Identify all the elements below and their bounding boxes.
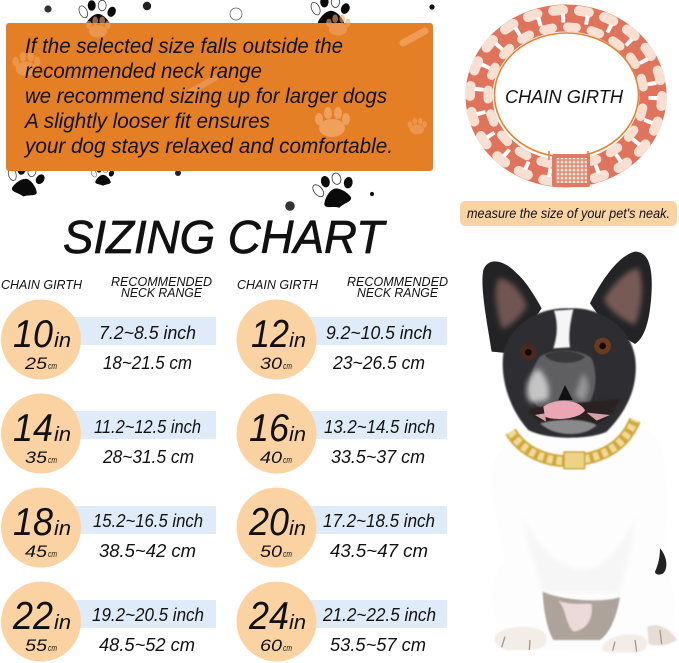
eyes <box>520 338 611 361</box>
size row: 12 in: in <box>289 330 306 352</box>
size row: 16 in: 13.2~14.5 inch <box>324 417 435 437</box>
title: SIZING CHART <box>63 211 387 263</box>
size row: 18 in: 38.5~42 cm <box>99 541 196 561</box>
size row: 14 in: in <box>54 424 71 446</box>
right ear <box>590 252 652 344</box>
caption pill: measure the size of your pet's neak. <box>467 206 670 221</box>
size row: 10 in: in <box>54 330 71 352</box>
size row: 12 in: 12 <box>251 313 289 356</box>
gold chain collar <box>511 420 635 469</box>
size row: 14 in: 28~31.5 cm <box>102 447 194 467</box>
size row: 24 in: 60 <box>260 636 283 655</box>
dog body <box>492 420 675 653</box>
label: chain girth: CHAIN GIRTH <box>505 87 624 107</box>
size row: 24 in <box>236 582 447 662</box>
size row: 16 in: cm <box>283 455 292 465</box>
size row: 18 in: 45 <box>25 542 48 561</box>
size row: 22 in: 19.2~20.5 inch <box>92 605 204 625</box>
size row: 22 in: 22 <box>12 595 53 638</box>
size row: 22 in: cm <box>48 643 57 653</box>
size row: 10 in: 18~21.5 cm <box>103 353 192 373</box>
column headers: right: NECK RANGE <box>357 286 439 300</box>
size row: 16 in: 16 <box>249 407 289 450</box>
size row: 20 in: 43.5~47 cm <box>330 541 428 561</box>
size row: 18 in: cm <box>48 549 57 559</box>
caption pill <box>460 201 677 226</box>
size row: 16 in: 33.5~37 cm <box>331 447 425 467</box>
size row: 24 in: cm <box>283 643 292 653</box>
belly patch <box>543 592 620 640</box>
size row: 22 in <box>1 582 216 662</box>
girth ring <box>494 33 638 157</box>
size row: 24 in: 21.2~22.5 inch <box>322 605 436 625</box>
column headers: left <box>1 275 212 300</box>
advice text <box>23 35 393 158</box>
chain girth diagram <box>470 10 662 187</box>
size row: 12 in: 9.2~10.5 inch <box>326 323 432 343</box>
column headers: left: NECK RANGE <box>121 286 203 300</box>
advice text: recommended neck range <box>25 60 262 83</box>
paw toe lines <box>502 630 662 652</box>
column headers: left: CHAIN GIRTH <box>1 278 83 292</box>
size row: 24 in: in <box>289 612 306 634</box>
tongue <box>543 401 585 419</box>
size row: 16 in <box>236 394 447 474</box>
size row: 24 in: 24 <box>248 595 289 638</box>
front and back paws <box>495 625 677 653</box>
size row: 10 in: 25 <box>24 354 48 373</box>
size row: 18 in: 15.2~16.5 inch <box>93 511 203 531</box>
column headers: left: RECOMMENDED <box>111 275 212 289</box>
size row: 16 in: in <box>289 424 306 446</box>
size row: 10 in: cm <box>48 361 57 371</box>
size row: 16 in: 40 <box>260 448 283 467</box>
size row: 22 in: 55 <box>25 636 48 655</box>
size row: 14 in: 35 <box>25 448 48 467</box>
size row: 14 in <box>1 394 216 474</box>
advice text: A slightly looser fit ensures <box>23 110 270 133</box>
size row: 20 in <box>236 488 447 568</box>
muzzle <box>530 351 595 410</box>
white blaze <box>553 309 573 348</box>
size row: 10 in: 10 <box>13 313 53 356</box>
size row: 18 in: in <box>54 518 71 540</box>
mouth opening <box>558 385 573 400</box>
column headers: right <box>237 275 448 300</box>
size row: 24 in: 53.5~57 cm <box>330 635 426 655</box>
icon: rose gold chain <box>470 10 662 182</box>
advice text: we recommend sizing up for larger dogs <box>25 85 387 108</box>
column headers: right: CHAIN GIRTH <box>237 278 319 292</box>
size row: 20 in: 17.2~18.5 inch <box>323 511 435 531</box>
background paw prints <box>3 0 435 214</box>
size row: 18 in <box>1 488 216 568</box>
chin <box>540 420 597 434</box>
left ear <box>482 261 542 353</box>
advice text: If the selected size falls outside the <box>25 35 343 58</box>
size row: 14 in: cm <box>48 455 57 465</box>
size row: 12 in: cm <box>283 361 292 371</box>
size row: 10 in: 7.2~8.5 inch <box>99 323 196 343</box>
panel: orange sizing advice <box>6 14 433 171</box>
advice text: your dog stays relaxed and comfortable. <box>23 135 393 158</box>
size row: 14 in: 14 <box>13 407 53 450</box>
size row: 22 in: 48.5~52 cm <box>99 635 195 655</box>
column headers: right: RECOMMENDED <box>347 275 448 289</box>
nose <box>545 351 585 363</box>
size row: 20 in: 20 <box>248 501 289 544</box>
size row: 12 in: 23~26.5 cm <box>332 353 425 373</box>
size row: 20 in: in <box>289 518 306 540</box>
icon: clasp <box>549 151 590 187</box>
body shading <box>520 513 637 593</box>
size row: 22 in: in <box>54 612 71 634</box>
size row: 10 in <box>1 300 216 380</box>
size row: 14 in: 11.2~12.5 inch <box>94 417 201 437</box>
size row: 20 in: cm <box>283 549 292 559</box>
illustration: French bulldog wearing a gold chain <box>482 252 677 653</box>
faint paw and bone decoration <box>12 14 427 137</box>
size row: 12 in: 30 <box>260 354 283 373</box>
black flank patch <box>655 548 666 575</box>
size row: 20 in: 50 <box>260 542 283 561</box>
size row: 12 in <box>236 300 447 380</box>
size row: 18 in: 18 <box>13 501 53 544</box>
head <box>503 308 636 438</box>
